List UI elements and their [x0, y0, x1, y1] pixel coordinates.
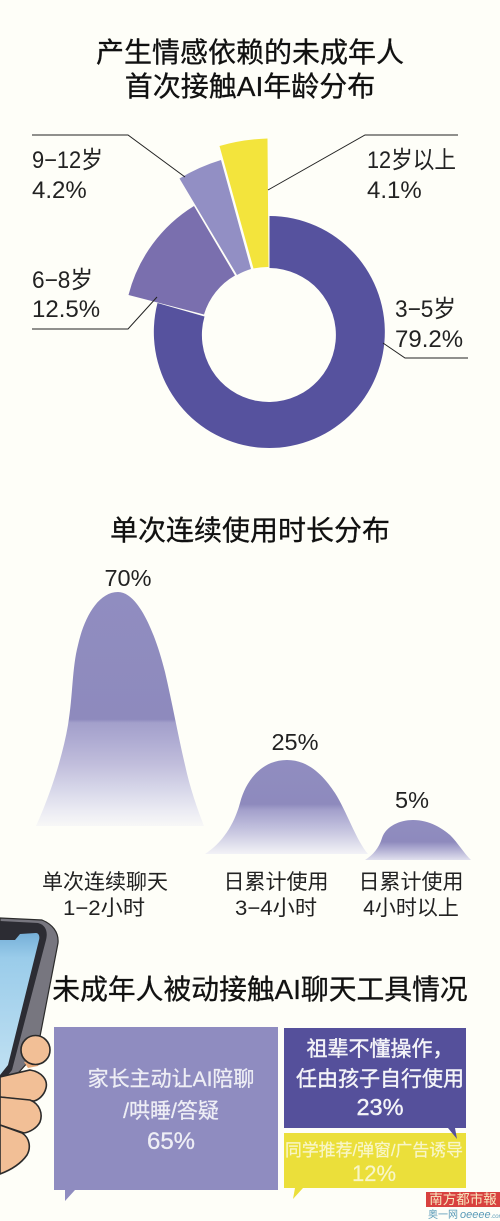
callout: parents 65%: [54, 1027, 278, 1201]
label: daily 3-4 hours: [224, 871, 328, 920]
leader line: 6-8 years: [32, 297, 157, 329]
bell: 5%: [365, 820, 471, 860]
icon: hand holding phone: [0, 918, 58, 1174]
title: age of first AI contact: [96, 37, 404, 102]
fingers: [0, 1070, 46, 1174]
label: over 12 years: [367, 147, 456, 204]
callout: students / ads 12%: [284, 1133, 466, 1199]
bell: 70%: [36, 592, 204, 826]
title: age of first AI contact: 产生情感依赖的未成年人: [96, 37, 404, 68]
phone bezel: [0, 921, 47, 1085]
title: session duration: 单次连续使用时长分布: [110, 515, 390, 546]
label: continuous chat: [42, 871, 168, 920]
label: 3-5 years: 79.2%: [395, 326, 463, 353]
label: 6-8 years: [32, 267, 100, 323]
callout: grandparents 23%: [284, 1028, 466, 1139]
label: daily over 4 hours: 日累计使用: [358, 871, 464, 894]
leader line: over 12 years: [268, 135, 458, 190]
label: continuous chat: 1−2小时: [63, 897, 145, 920]
label: 3-5 years: 3−5岁: [395, 296, 456, 323]
label: daily 3-4 hours: 3−4小时: [235, 897, 317, 920]
callout: grandparents 23%: 23%: [356, 1094, 404, 1120]
label: 6-8 years: 6−8岁: [32, 267, 93, 294]
logo: newspaper: 奥一网: [428, 1208, 458, 1221]
label: over 12 years: 4.1%: [367, 177, 422, 204]
label: daily 3-4 hours: 日累计使用: [224, 871, 328, 894]
segment: 9-12 years: [180, 160, 251, 275]
segment: 6-8 years: [128, 206, 235, 314]
value: 5%: 5%: [395, 787, 429, 813]
label: 9-12 years: [32, 147, 103, 204]
phone screen: [0, 933, 39, 1075]
label: 9-12 years: 4.2%: [32, 177, 87, 204]
value: 25%: 25%: [271, 729, 319, 755]
leader line: 9-12 years: [32, 135, 185, 177]
phone body: [0, 918, 58, 1100]
bell: 25%: [205, 760, 368, 854]
callout: parents 65%: 65%: [147, 1128, 195, 1155]
segment: 3-5 years: [154, 216, 385, 448]
label: daily over 4 hours: 4小时以上: [363, 897, 459, 920]
leader line: 3-5 years: [383, 343, 468, 358]
label: over 12 years: 12岁以上: [367, 147, 456, 174]
logo: newspaper: [426, 1191, 500, 1221]
callout: grandparents 23%: 祖辈不懂操作，: [306, 1038, 454, 1061]
title: passive contact with AI chat tools: 未成年人被动接触AI聊天工具情况: [52, 974, 468, 1005]
segment: over 12 years: [220, 138, 268, 268]
thumb: [21, 1036, 50, 1068]
callout: students / ads 12%: 12%: [352, 1161, 396, 1186]
label: 3-5 years: [395, 296, 463, 353]
label: continuous chat: 单次连续聊天: [42, 871, 168, 894]
value: 70%: 70%: [104, 565, 152, 591]
label: 6-8 years: 12.5%: [32, 296, 100, 323]
label: 9-12 years: 9−12岁: [32, 147, 103, 174]
logo: newspaper: 南方都市報: [429, 1191, 497, 1207]
callout: grandparents 23%: 任由孩子自行使用: [296, 1068, 464, 1091]
callout: parents 65%: 家长主动让AI陪聊: [88, 1068, 254, 1091]
bell chart: session duration: [36, 592, 471, 860]
label: daily over 4 hours: [358, 871, 464, 920]
callout: parents 65%: /哄睡/答疑: [123, 1100, 219, 1123]
title: age of first AI contact: 首次接触AI年龄分布: [125, 71, 375, 102]
donut chart: first contact age: [128, 138, 385, 448]
callout: students / ads 12%: 同学推荐/弹窗/广告诱导: [285, 1141, 463, 1160]
